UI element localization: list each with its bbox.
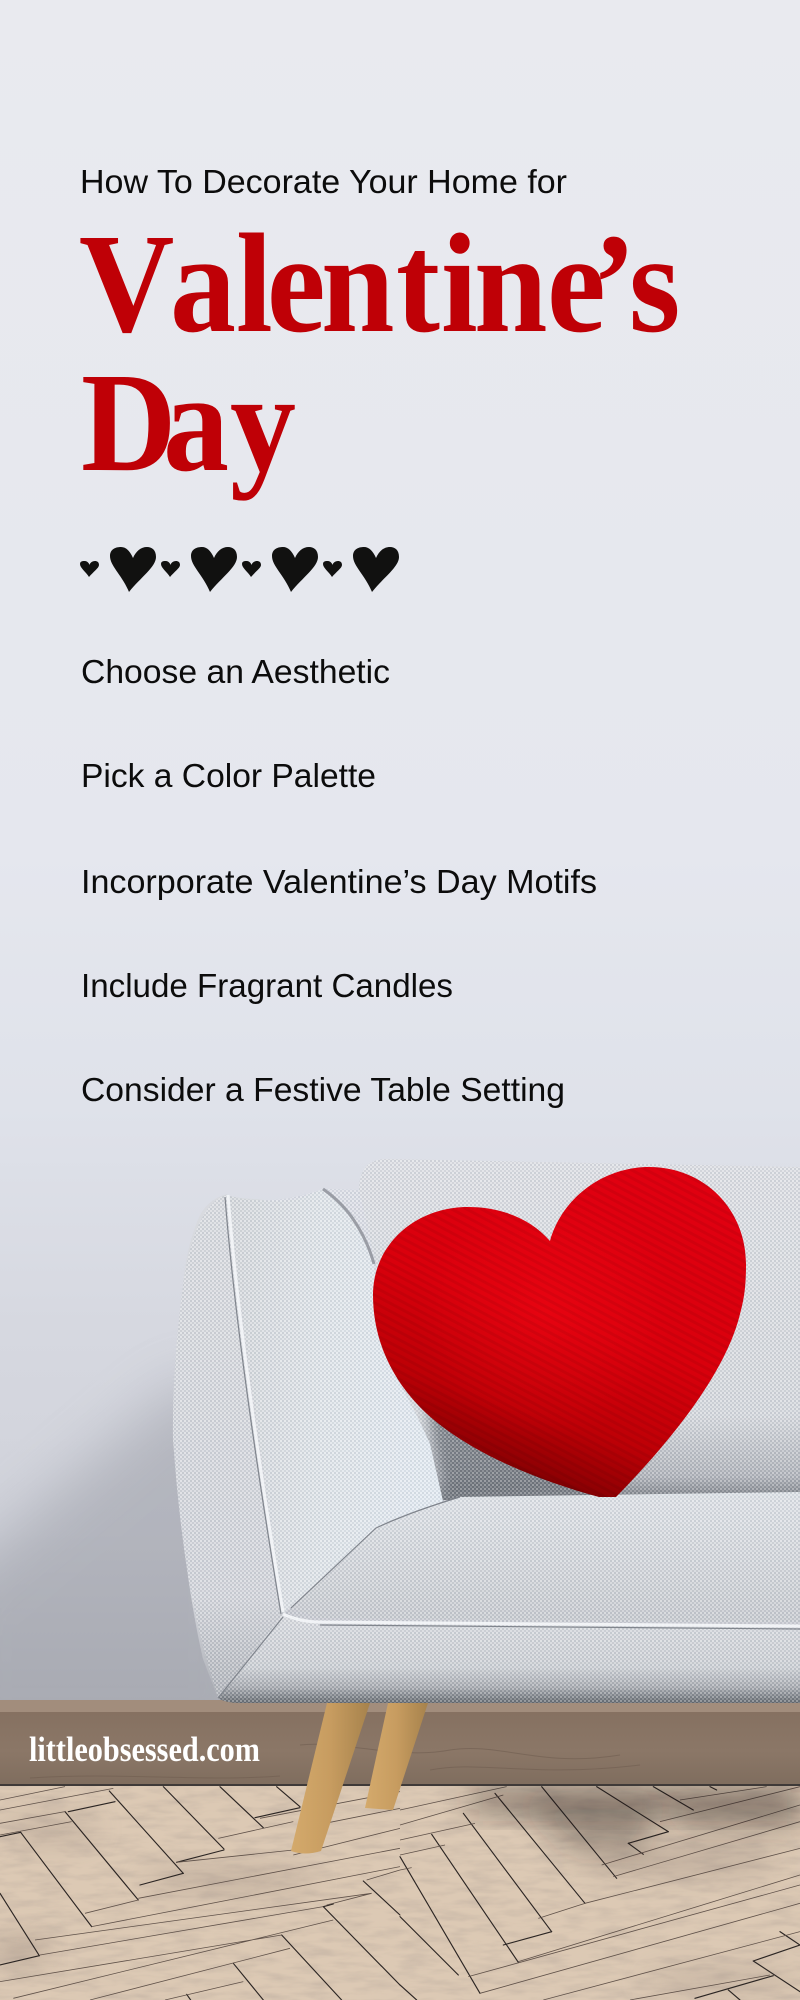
tip 5: Consider a Festive Table Setting <box>81 1071 565 1108</box>
tip 4: Include Fragrant Candles <box>81 967 453 1004</box>
title: Valentine's Day: Valentine’s <box>79 205 680 362</box>
sofa arm <box>173 1194 283 1698</box>
tip 3: Incorporate Valentine’s Day Motifs <box>81 863 597 900</box>
fabric weave <box>173 1159 800 1703</box>
side cushion <box>226 1189 443 1614</box>
title: Valentine's Day <box>79 205 680 501</box>
baseboard <box>0 1700 800 1786</box>
sofa front rail <box>218 1614 800 1703</box>
floor grain <box>0 1785 800 2000</box>
website url: littleobsessed.com <box>29 1730 260 1769</box>
seat cushion <box>291 1492 800 1622</box>
list of tips <box>81 653 597 1108</box>
sofa shadow on wall <box>0 1376 221 1700</box>
right plank lines <box>400 1787 800 2000</box>
piping seams <box>228 1195 800 1626</box>
title: Valentine's Day: Day <box>81 344 296 501</box>
shadow behind heart <box>425 1400 620 1498</box>
tip 2: Pick a Color Palette <box>81 757 376 794</box>
tip 1: Choose an Aesthetic <box>81 653 390 690</box>
heart pillow <box>370 1160 750 1500</box>
floor: herringbone planks <box>0 1785 800 2000</box>
sofa shadow on floor <box>470 1790 800 1850</box>
sofa back cushion <box>359 1159 800 1500</box>
sofa <box>173 1159 800 1703</box>
left plank lines <box>0 1787 400 2000</box>
cushion edge shade <box>323 1189 374 1264</box>
icon: row of hearts divider <box>80 547 399 592</box>
subtitle: How To Decorate Your Home for <box>80 163 567 200</box>
sofa legs <box>291 1703 428 1854</box>
floor stains <box>0 1816 800 1992</box>
